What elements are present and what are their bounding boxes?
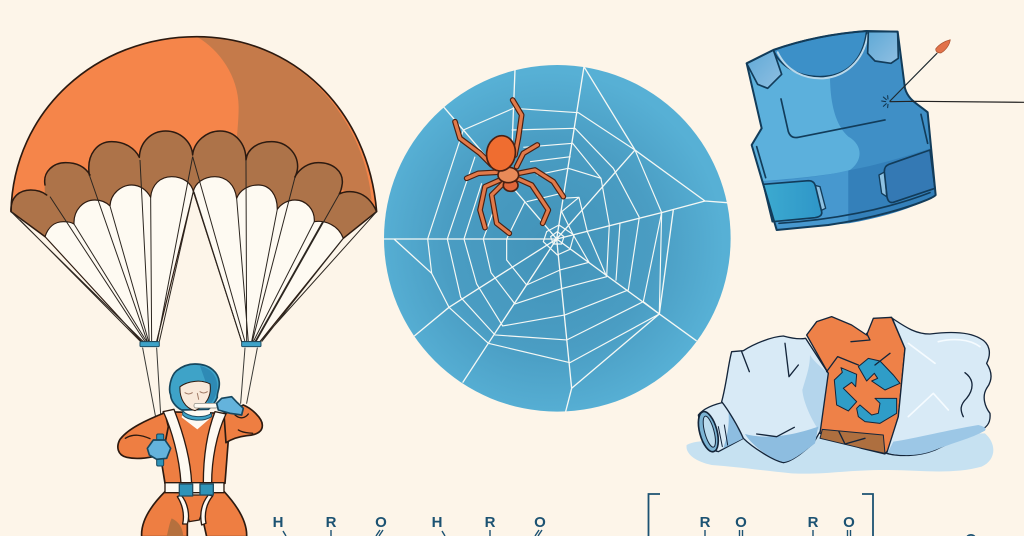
left suspension lines: [11, 157, 193, 342]
face: [180, 381, 210, 411]
vest outline: [747, 31, 936, 230]
bottle bottom shade: [745, 427, 818, 462]
spider thorax: [498, 167, 519, 183]
left arm: [118, 413, 168, 458]
atom labels: R: [808, 514, 819, 531]
bottom arrow: [857, 398, 897, 423]
right bracket: [862, 494, 873, 536]
left bracket: [648, 494, 660, 536]
helmet: [170, 364, 219, 410]
disc: [384, 65, 731, 412]
background gap between risers: [158, 193, 241, 342]
vest light panel: [747, 50, 860, 181]
left bottle section: [722, 336, 828, 463]
parachutist: [118, 348, 262, 536]
web radial threads: [384, 67, 727, 412]
canopy outline: [11, 37, 377, 212]
spider legs fill: [455, 100, 563, 233]
left pocket tab: [813, 185, 826, 211]
bullet trail: [890, 53, 937, 101]
brown scallops fill: [11, 131, 377, 238]
parachute: [11, 37, 377, 347]
bulletproof vest: [747, 31, 1024, 230]
left glove: [147, 440, 171, 459]
atom labels: O: [375, 514, 387, 531]
left section creases: [742, 343, 798, 437]
right glove: [217, 397, 243, 415]
symbol crease: [875, 353, 890, 365]
atom labels: O: [735, 514, 747, 531]
right bottle section: [887, 318, 991, 456]
crotch and leg straps: [182, 495, 208, 522]
callout line: [890, 100, 1024, 104]
harness straps: [163, 409, 226, 483]
right leg: [200, 491, 247, 536]
atom labels: [273, 514, 977, 536]
belt: [165, 483, 224, 493]
spider web disc: [384, 65, 731, 412]
vest seams: [757, 99, 930, 223]
helmet shade: [200, 366, 217, 407]
bottle neck: [698, 402, 743, 452]
atom labels: R: [485, 514, 496, 531]
left leg shade: [167, 518, 183, 536]
right pocket tab: [879, 172, 887, 197]
recycled plastic bottle: [686, 317, 993, 474]
bottle shadow: [686, 433, 993, 474]
bonds: [283, 530, 850, 536]
canopy: [11, 37, 377, 212]
atom labels: R: [700, 514, 711, 531]
atom labels: H: [273, 514, 283, 531]
recycling symbol: [834, 353, 900, 423]
left arm fold: [125, 435, 150, 439]
right connector: [242, 342, 261, 347]
atom labels: O: [843, 514, 855, 531]
atom labels: R: [326, 514, 337, 531]
scallop outlines: [11, 131, 377, 238]
spider: [455, 100, 563, 233]
impact mark: [882, 96, 888, 108]
left arrow: [834, 368, 857, 411]
vest lower band: [763, 170, 848, 229]
cap opening: [701, 415, 718, 448]
right shoulder pad: [868, 32, 898, 63]
label shaded fold: [820, 429, 885, 453]
riser lines: [143, 348, 257, 437]
neck ridge lines: [718, 425, 728, 447]
neck shade: [723, 410, 743, 448]
bottle cap ring: [695, 409, 722, 454]
right section lower shade: [888, 425, 986, 455]
spider head: [503, 179, 518, 191]
right section creases: [908, 340, 980, 417]
belt buckles: [179, 484, 213, 496]
bottle side shade: [802, 355, 828, 432]
label creases: [827, 333, 870, 444]
atom labels: O: [534, 514, 546, 531]
chemical structure fragment: [273, 494, 977, 536]
left connector: [140, 342, 159, 347]
top arrow: [858, 358, 900, 390]
vest body: [747, 31, 936, 230]
collar: [182, 408, 210, 429]
canopy shaded side: [197, 37, 372, 200]
toothbrush: [194, 403, 218, 408]
spider legs outline: [455, 100, 563, 233]
eyes and nose: [185, 392, 207, 399]
right arm: [224, 405, 262, 443]
bullet: [936, 40, 950, 53]
white gore panels: [45, 177, 343, 342]
torso: [161, 412, 228, 483]
atom labels: H: [432, 514, 442, 531]
left pocket: [763, 181, 822, 222]
grip handle: [157, 434, 164, 466]
right suspension lines: [193, 157, 377, 342]
neck opening: [773, 31, 867, 77]
wavy crease: [961, 373, 972, 417]
left leg: [142, 492, 187, 536]
spider abdomen: [484, 134, 518, 173]
right pocket: [884, 150, 935, 202]
orange label: [807, 317, 905, 454]
left shoulder pad: [747, 50, 782, 88]
web spiral threads: [428, 108, 662, 363]
right arm fold: [235, 414, 253, 433]
